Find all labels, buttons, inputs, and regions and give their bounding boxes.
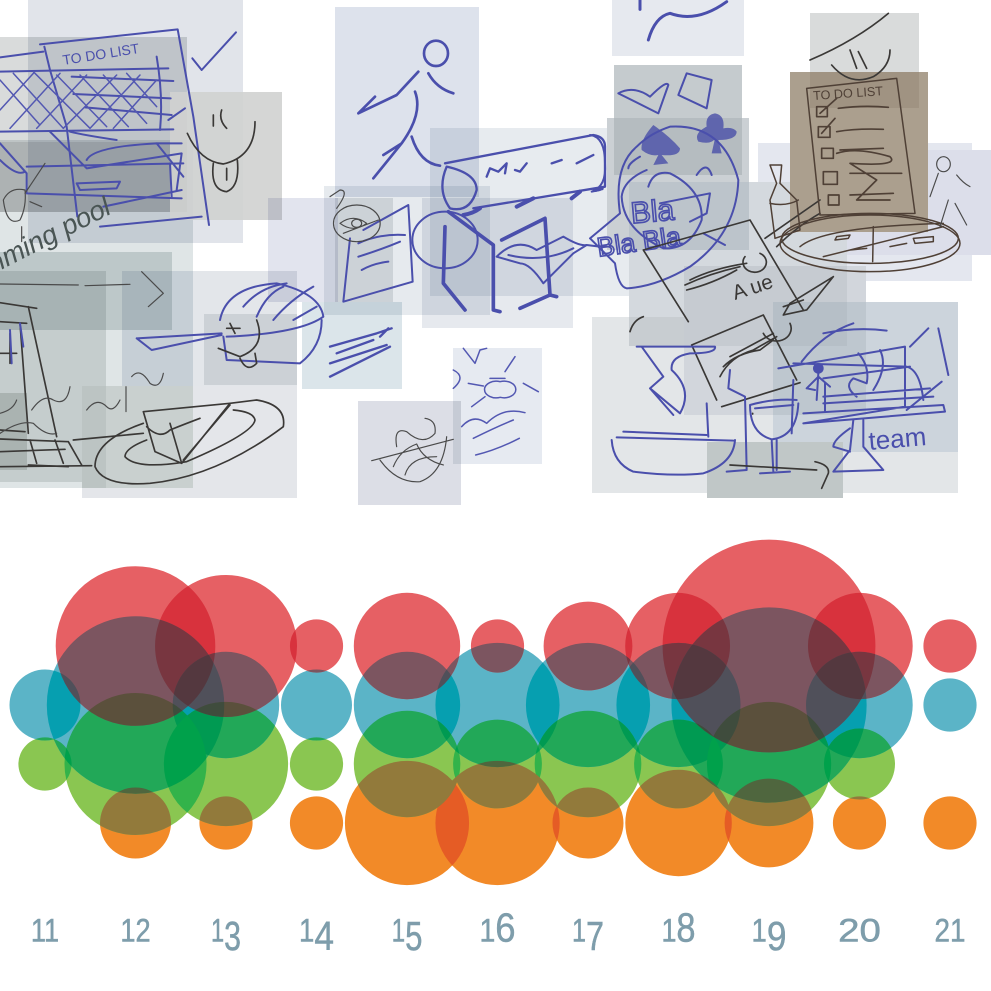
axis numbers: 1 bbox=[392, 914, 405, 950]
axis numbers: 21 bbox=[935, 914, 965, 949]
icon: sofa and person bbox=[778, 323, 948, 423]
blue and green overlaps bbox=[35, 710, 891, 803]
handwriting: team: team bbox=[867, 421, 927, 456]
green and orange overlaps bbox=[100, 760, 870, 835]
icon: ice cream stand bbox=[833, 420, 883, 472]
axis numbers: 18 bbox=[661, 906, 696, 951]
axis numbers: 9 bbox=[767, 914, 786, 960]
icon: to do list checklist bbox=[807, 78, 915, 215]
axis numbers: 1 bbox=[211, 913, 224, 949]
icon: top smiley bbox=[810, 13, 890, 80]
sketch cluster: right bbox=[590, 0, 970, 488]
icon: to do list checklist: TO DO LIST bbox=[813, 84, 884, 103]
icon: bus bbox=[442, 135, 605, 215]
icon: frying pan bbox=[137, 283, 323, 367]
icon: stick figure bbox=[358, 41, 453, 178]
axis numbers: 20 bbox=[838, 914, 881, 949]
icon: talking head bbox=[590, 126, 738, 288]
same-row overlaps bbox=[46, 586, 876, 866]
icon: talking head: Bla bbox=[629, 194, 676, 230]
axis numbers: 7 bbox=[586, 914, 604, 959]
sketch cluster: left bbox=[0, 29, 323, 484]
squiggles bbox=[0, 373, 163, 434]
scribble circle bbox=[3, 163, 45, 242]
icon: check mark bbox=[192, 32, 236, 70]
icon: bowl bbox=[612, 432, 735, 475]
to do list sketch: TO DO LIST bbox=[61, 40, 141, 68]
bubbles: orange row bbox=[100, 782, 977, 886]
axis numbers: 3 bbox=[224, 913, 241, 959]
axis numbers: 12 bbox=[120, 914, 151, 949]
icon: paintbrushes and sheets: A ue bbox=[729, 270, 776, 305]
bubble chart bbox=[10, 540, 977, 886]
icon: small stick figure bbox=[930, 157, 970, 227]
axis numbers: 11 bbox=[31, 914, 59, 949]
tower sketch bbox=[0, 303, 92, 467]
axis numbers bbox=[31, 906, 965, 960]
icon: table with legs bbox=[443, 212, 557, 312]
wavy dark line bbox=[630, 317, 828, 488]
icon: paintbrushes and sheets bbox=[643, 200, 833, 407]
icon: pizza bbox=[780, 213, 960, 272]
axis numbers: 16 bbox=[479, 906, 516, 951]
to do list sketch bbox=[0, 29, 236, 227]
icon: wine glass bbox=[750, 400, 798, 473]
icon: tongue smiley bbox=[187, 110, 255, 192]
icon: talking head: Bla Bla bbox=[595, 221, 683, 263]
icon: lips bbox=[497, 237, 607, 283]
icon: card suits bbox=[618, 73, 737, 165]
icon: sun and waves bbox=[453, 348, 538, 455]
bubbles: red row bbox=[56, 540, 977, 710]
bubbles: green row bbox=[18, 726, 895, 835]
icon: fish bbox=[330, 328, 392, 377]
red and blue overlaps bbox=[58, 607, 904, 752]
sketch paper scraps bbox=[0, 0, 991, 505]
squiggle at top bbox=[640, 0, 727, 40]
axis numbers: 1 bbox=[752, 914, 767, 949]
axis numbers: 1 bbox=[299, 914, 314, 949]
icon: bottle outline bbox=[707, 370, 793, 472]
arrow line bbox=[0, 272, 163, 307]
icon: cake slice on plate bbox=[73, 400, 284, 484]
bubbles: blue row bbox=[10, 648, 977, 796]
axis numbers: 1 bbox=[572, 914, 586, 949]
axis numbers: 5 bbox=[405, 913, 422, 959]
axis numbers: 4 bbox=[314, 914, 334, 960]
icon: leaf bowl bbox=[372, 418, 453, 482]
icon: steam squiggle bbox=[637, 347, 715, 415]
sketch cluster: middle bbox=[330, 41, 607, 482]
icon: note page bbox=[343, 205, 413, 302]
icon: eye bbox=[330, 190, 380, 242]
icon: bottle bbox=[770, 165, 800, 238]
